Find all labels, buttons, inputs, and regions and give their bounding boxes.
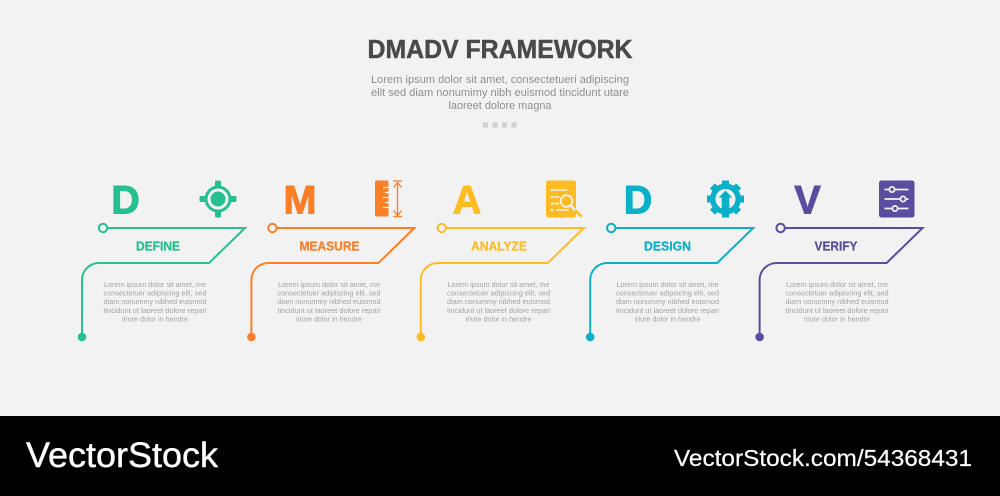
- icon: ruler and arrow: [375, 180, 402, 216]
- description: [786, 280, 889, 324]
- panel: design: [586, 178, 753, 341]
- label: ANALYZE: [471, 240, 527, 254]
- start ring: [438, 224, 446, 232]
- description: consectetuer adipiscing elit, sed: [786, 288, 888, 298]
- description: Lorem ipsum dolor sit amet, me: [104, 280, 206, 289]
- description: Lorem ipsum dolor sit amet, me: [616, 280, 718, 289]
- end dot: [416, 333, 425, 341]
- description: diam nonummy nibhed euismod: [786, 297, 888, 306]
- end dot: [586, 333, 594, 341]
- description: diam nonummy nibhed euismod: [447, 297, 550, 306]
- panel: define: [78, 178, 245, 341]
- description: diam nonummy nibhed euismod: [104, 297, 206, 306]
- description: [616, 280, 719, 324]
- icon: target: [200, 180, 236, 218]
- subtitle text: [371, 74, 629, 112]
- description: diam nonummy nibhed euismod: [616, 297, 719, 306]
- description: Lorem ipsum dolor sit amet, me: [278, 280, 380, 289]
- panel: measure: [247, 178, 414, 341]
- label: DESIGN: [644, 240, 691, 254]
- letter D: D: [111, 178, 140, 222]
- subtitle text: Lorem ipsum dolor sit amet, consectetueri adipiscing: [371, 74, 629, 86]
- pagination dots: [483, 122, 516, 128]
- description: consectetuer adipiscing elit, sed: [278, 288, 380, 298]
- footer logo: VectorStock: [26, 436, 219, 475]
- description: tincidunt ut laoreet dolore repari: [616, 306, 719, 315]
- footer bar: [0, 416, 1000, 496]
- description: iriure dolor in hendre: [122, 314, 188, 324]
- description: tincidunt ut laoreet dolore repari: [278, 306, 381, 315]
- connector outline: [82, 228, 245, 337]
- description: consectetuer adipiscing elit, sed: [616, 288, 719, 298]
- letter M: M: [284, 178, 316, 222]
- end dot: [755, 333, 764, 341]
- description: consectetuer adipiscing elit, sed: [447, 288, 550, 298]
- description: iriure dolor in hendre: [296, 314, 362, 324]
- subtitle text: laoreet dolore magna: [448, 100, 552, 112]
- label: VERIFY: [814, 240, 858, 254]
- connector outline: [760, 228, 923, 337]
- end dot: [247, 333, 256, 341]
- start ring: [268, 224, 277, 232]
- description: iriure dolor in hendre: [804, 314, 870, 324]
- description: [104, 280, 207, 324]
- connector outline: [421, 228, 584, 337]
- description: tincidunt ut laoreet dolore repari: [447, 306, 550, 315]
- panel: analyze: [416, 178, 584, 341]
- icon: sliders: [879, 180, 914, 218]
- description: [278, 280, 381, 324]
- connector outline: [251, 228, 414, 337]
- icon: document with magnifier: [546, 180, 581, 218]
- description: tincidunt ut laoreet dolore repari: [104, 306, 207, 315]
- subtitle text: elit sed diam nonumimy nibh euismod tincidunt utare: [371, 87, 629, 99]
- start ring: [776, 224, 785, 232]
- description: Lorem ipsum dolor sit amet, me: [786, 280, 888, 289]
- letter V: V: [794, 178, 821, 222]
- icon: gear with up arrow: [707, 180, 744, 218]
- description: iriure dolor in hendre: [466, 314, 532, 324]
- label: DEFINE: [136, 240, 180, 254]
- start ring: [99, 224, 107, 232]
- label: MEASURE: [300, 240, 360, 254]
- letter A: A: [453, 178, 481, 222]
- letter D: D: [624, 178, 652, 222]
- description: diam nonummy nibhed euismod: [278, 297, 380, 306]
- description: iriure dolor in hendre: [634, 314, 700, 324]
- title: DMADV FRAMEWORK: [368, 34, 633, 64]
- footer url: VectorStock.com/54368431: [674, 445, 972, 471]
- description: consectetuer adipiscing elit, sed: [104, 288, 206, 298]
- description: Lorem ipsum dolor sit amet, me: [448, 280, 550, 289]
- connector outline: [590, 228, 753, 337]
- start ring: [607, 224, 615, 232]
- panel: verify: [755, 178, 923, 341]
- end dot: [78, 333, 86, 341]
- description: tincidunt ut laoreet dolore repari: [786, 306, 889, 315]
- description: [447, 280, 550, 324]
